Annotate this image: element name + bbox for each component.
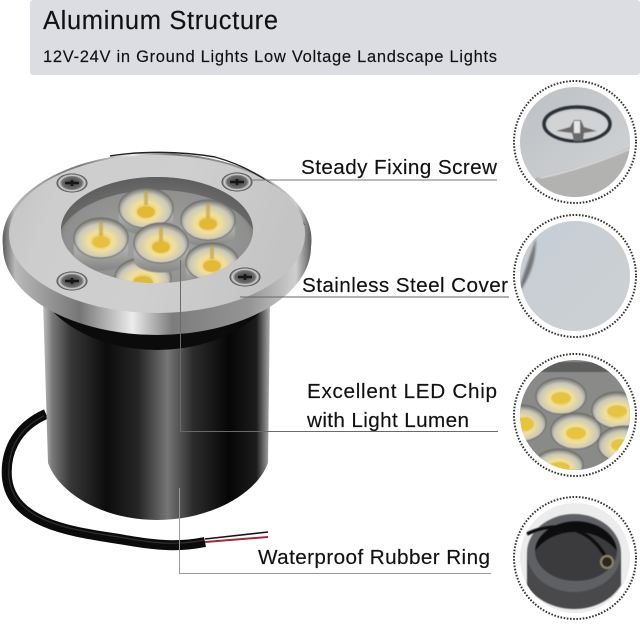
screw top left — [56, 174, 88, 192]
subtitle: 12V-24V in Ground Lights Low Voltage Landscape Lights — [43, 48, 497, 66]
LED 6 — [114, 258, 172, 283]
rim edge shadow — [110, 152, 304, 225]
cover rim — [2, 153, 312, 327]
screw bottom right — [230, 268, 260, 286]
screw bottom left — [56, 272, 88, 290]
callout: LED chip: Excellent LED Chip — [307, 380, 497, 403]
product: in-ground light — [2, 152, 312, 545]
callout: waterproof rubber ring — [180, 488, 491, 574]
header panel — [30, 0, 640, 75]
callout: LED chip — [180, 260, 498, 432]
LED 2 — [181, 200, 235, 246]
LED 5 — [186, 243, 238, 285]
callout: steady fixing screw: Steady Fixing Screw — [301, 156, 497, 179]
callout: stainless steel cover: Stainless Steel Cover — [302, 274, 508, 297]
LED 3 — [74, 218, 128, 270]
cable — [7, 414, 268, 545]
detail circle: rubber ring — [514, 497, 636, 619]
collar shadow — [31, 174, 283, 350]
detail circle: screw — [514, 81, 636, 210]
callout: LED chip: with Light Lumen — [306, 409, 469, 432]
screw top right — [222, 172, 252, 192]
lens window — [60, 177, 253, 283]
detail circle: LEDs — [513, 353, 637, 477]
cover skirt — [3, 159, 311, 335]
detail circle: steel — [514, 215, 636, 337]
title: Aluminum Structure — [43, 7, 278, 35]
cylinder body — [43, 300, 270, 520]
LED 4 — [134, 223, 188, 272]
cover plate — [9, 155, 305, 313]
callout: waterproof rubber ring: Waterproof Rubber Ring — [258, 546, 490, 569]
LED 1 — [119, 188, 173, 234]
